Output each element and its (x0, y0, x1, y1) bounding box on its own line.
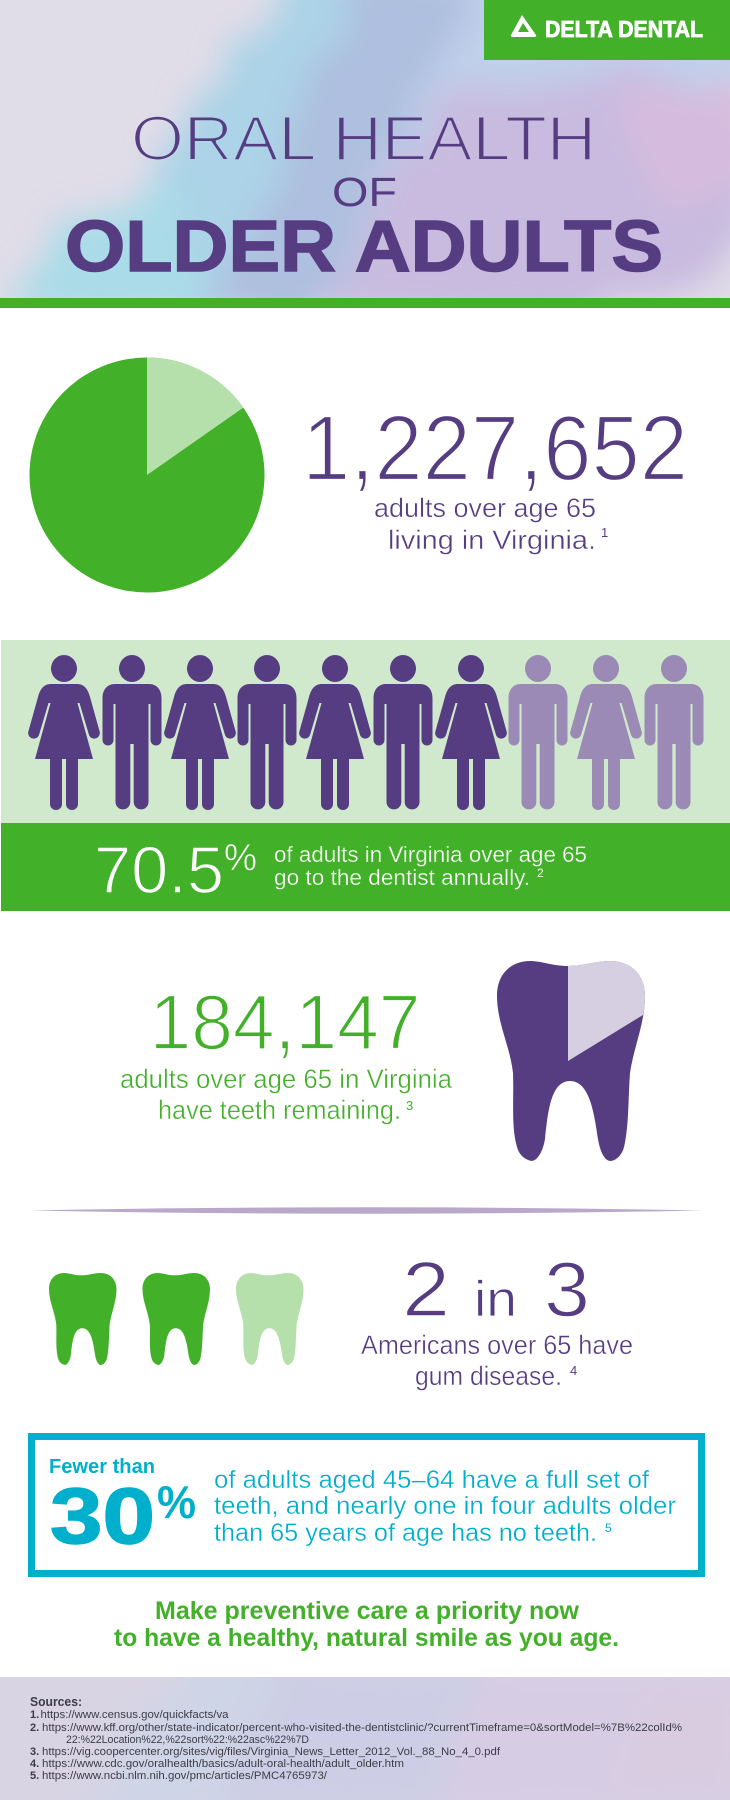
source list: https://www.kff.org/other/state-indicator/percent-who-visited-the-dentistclinic/?currentTimeframe=0&sortModel=%7B%22colId% (42, 1722, 682, 1734)
header background (0, 0, 730, 320)
stat: adults over 65: 1 (601, 525, 608, 540)
stat: 2 in 3 (361, 1245, 633, 1391)
caption: adults over age 65 (374, 493, 596, 523)
call to action (114, 1597, 619, 1652)
source list: 22:%22Location%22,%22sort%22:%22asc%22%7D (66, 1734, 309, 1746)
icon: delta triangle (511, 15, 536, 37)
source list: 5. (30, 1770, 39, 1782)
people dark (28, 655, 507, 810)
stat: 2 in 3: 4 (570, 1363, 577, 1378)
source list: 1. (30, 1709, 39, 1721)
title (65, 104, 663, 287)
panel: dentist visits band: 2 (537, 866, 544, 880)
panel: dentist visits band: % (224, 837, 257, 879)
source list: 4. (30, 1758, 39, 1770)
call to action: Make preventive care a priority now (155, 1597, 580, 1625)
big number: 184,147 (150, 978, 420, 1066)
source list: https://www.census.gov/quickfacts/va (40, 1709, 229, 1721)
panel: dentist visits band (1, 823, 730, 911)
icon: large tooth (497, 961, 645, 1161)
callout: full set of teeth: than 65 years of age has no teeth. (214, 1519, 597, 1547)
callout: full set of teeth: % (157, 1476, 196, 1528)
30 percent: 30 (50, 1471, 155, 1560)
people light (508, 655, 704, 810)
title line: of: OF (332, 169, 397, 215)
title line: older adults: OLDER ADULTS (65, 207, 663, 287)
source list: 3. (30, 1746, 39, 1758)
callout text: of adults aged 45–64 have a full set of (214, 1466, 649, 1494)
icons: three small teeth (49, 1273, 303, 1365)
stat: adults over 65 (302, 396, 688, 555)
divider (29, 1207, 703, 1214)
callout: full set of teeth (32, 1436, 702, 1574)
stat: teeth remaining (120, 978, 453, 1125)
callout: full set of teeth: teeth, and nearly one in four adults older (214, 1492, 676, 1520)
stat: 2 in 3: in (474, 1271, 517, 1327)
title line: oral health: ORAL HEALTH (131, 104, 596, 174)
source list (30, 1709, 682, 1782)
stat: teeth remaining: 3 (406, 1098, 413, 1113)
panel: people pictogram (1, 640, 730, 823)
panel: dentist visits band: go to the dentist annually. (274, 865, 530, 890)
source list: https://www.ncbi.nlm.nih.gov/pmc/articles/PMC4765973/ (42, 1770, 328, 1782)
fewer than: Fewer than (49, 1456, 155, 1478)
band caption: of adults in Virginia over age 65 (274, 842, 587, 867)
header green rule (0, 298, 730, 308)
caption: Americans over 65 have (361, 1330, 633, 1360)
footer background (0, 1677, 730, 1800)
stat: teeth remaining: have teeth remaining. (158, 1095, 401, 1125)
sources heading: Sources: (30, 1695, 82, 1709)
source list: https://www.cdc.gov/oralhealth/basics/adult-oral-health/adult_older.htm (42, 1758, 404, 1770)
call to action: to have a healthy, natural smile as you age. (114, 1624, 619, 1652)
sources (30, 1695, 682, 1782)
ratio: 2 (402, 1245, 450, 1333)
source list: 2. (30, 1722, 39, 1734)
stat: adults over 65: living in Virginia. (388, 525, 596, 555)
logo wordmark: DELTA DENTAL (545, 16, 703, 42)
source list: https://vig.coopercenter.org/sites/vig/files/Virginia_News_Letter_2012_Vol._88_No_4_0.pdf (42, 1746, 501, 1758)
big number: 1,227,652 (302, 396, 688, 500)
caption: adults over age 65 in Virginia (120, 1064, 453, 1094)
stat: 2 in 3: 3 (544, 1245, 590, 1333)
logo box (484, 0, 730, 60)
stat: 2 in 3: gum disease. (415, 1361, 562, 1391)
percent figure: 70.5 (94, 833, 224, 908)
callout: full set of teeth: 5 (605, 1521, 612, 1535)
pie chart (30, 357, 264, 592)
